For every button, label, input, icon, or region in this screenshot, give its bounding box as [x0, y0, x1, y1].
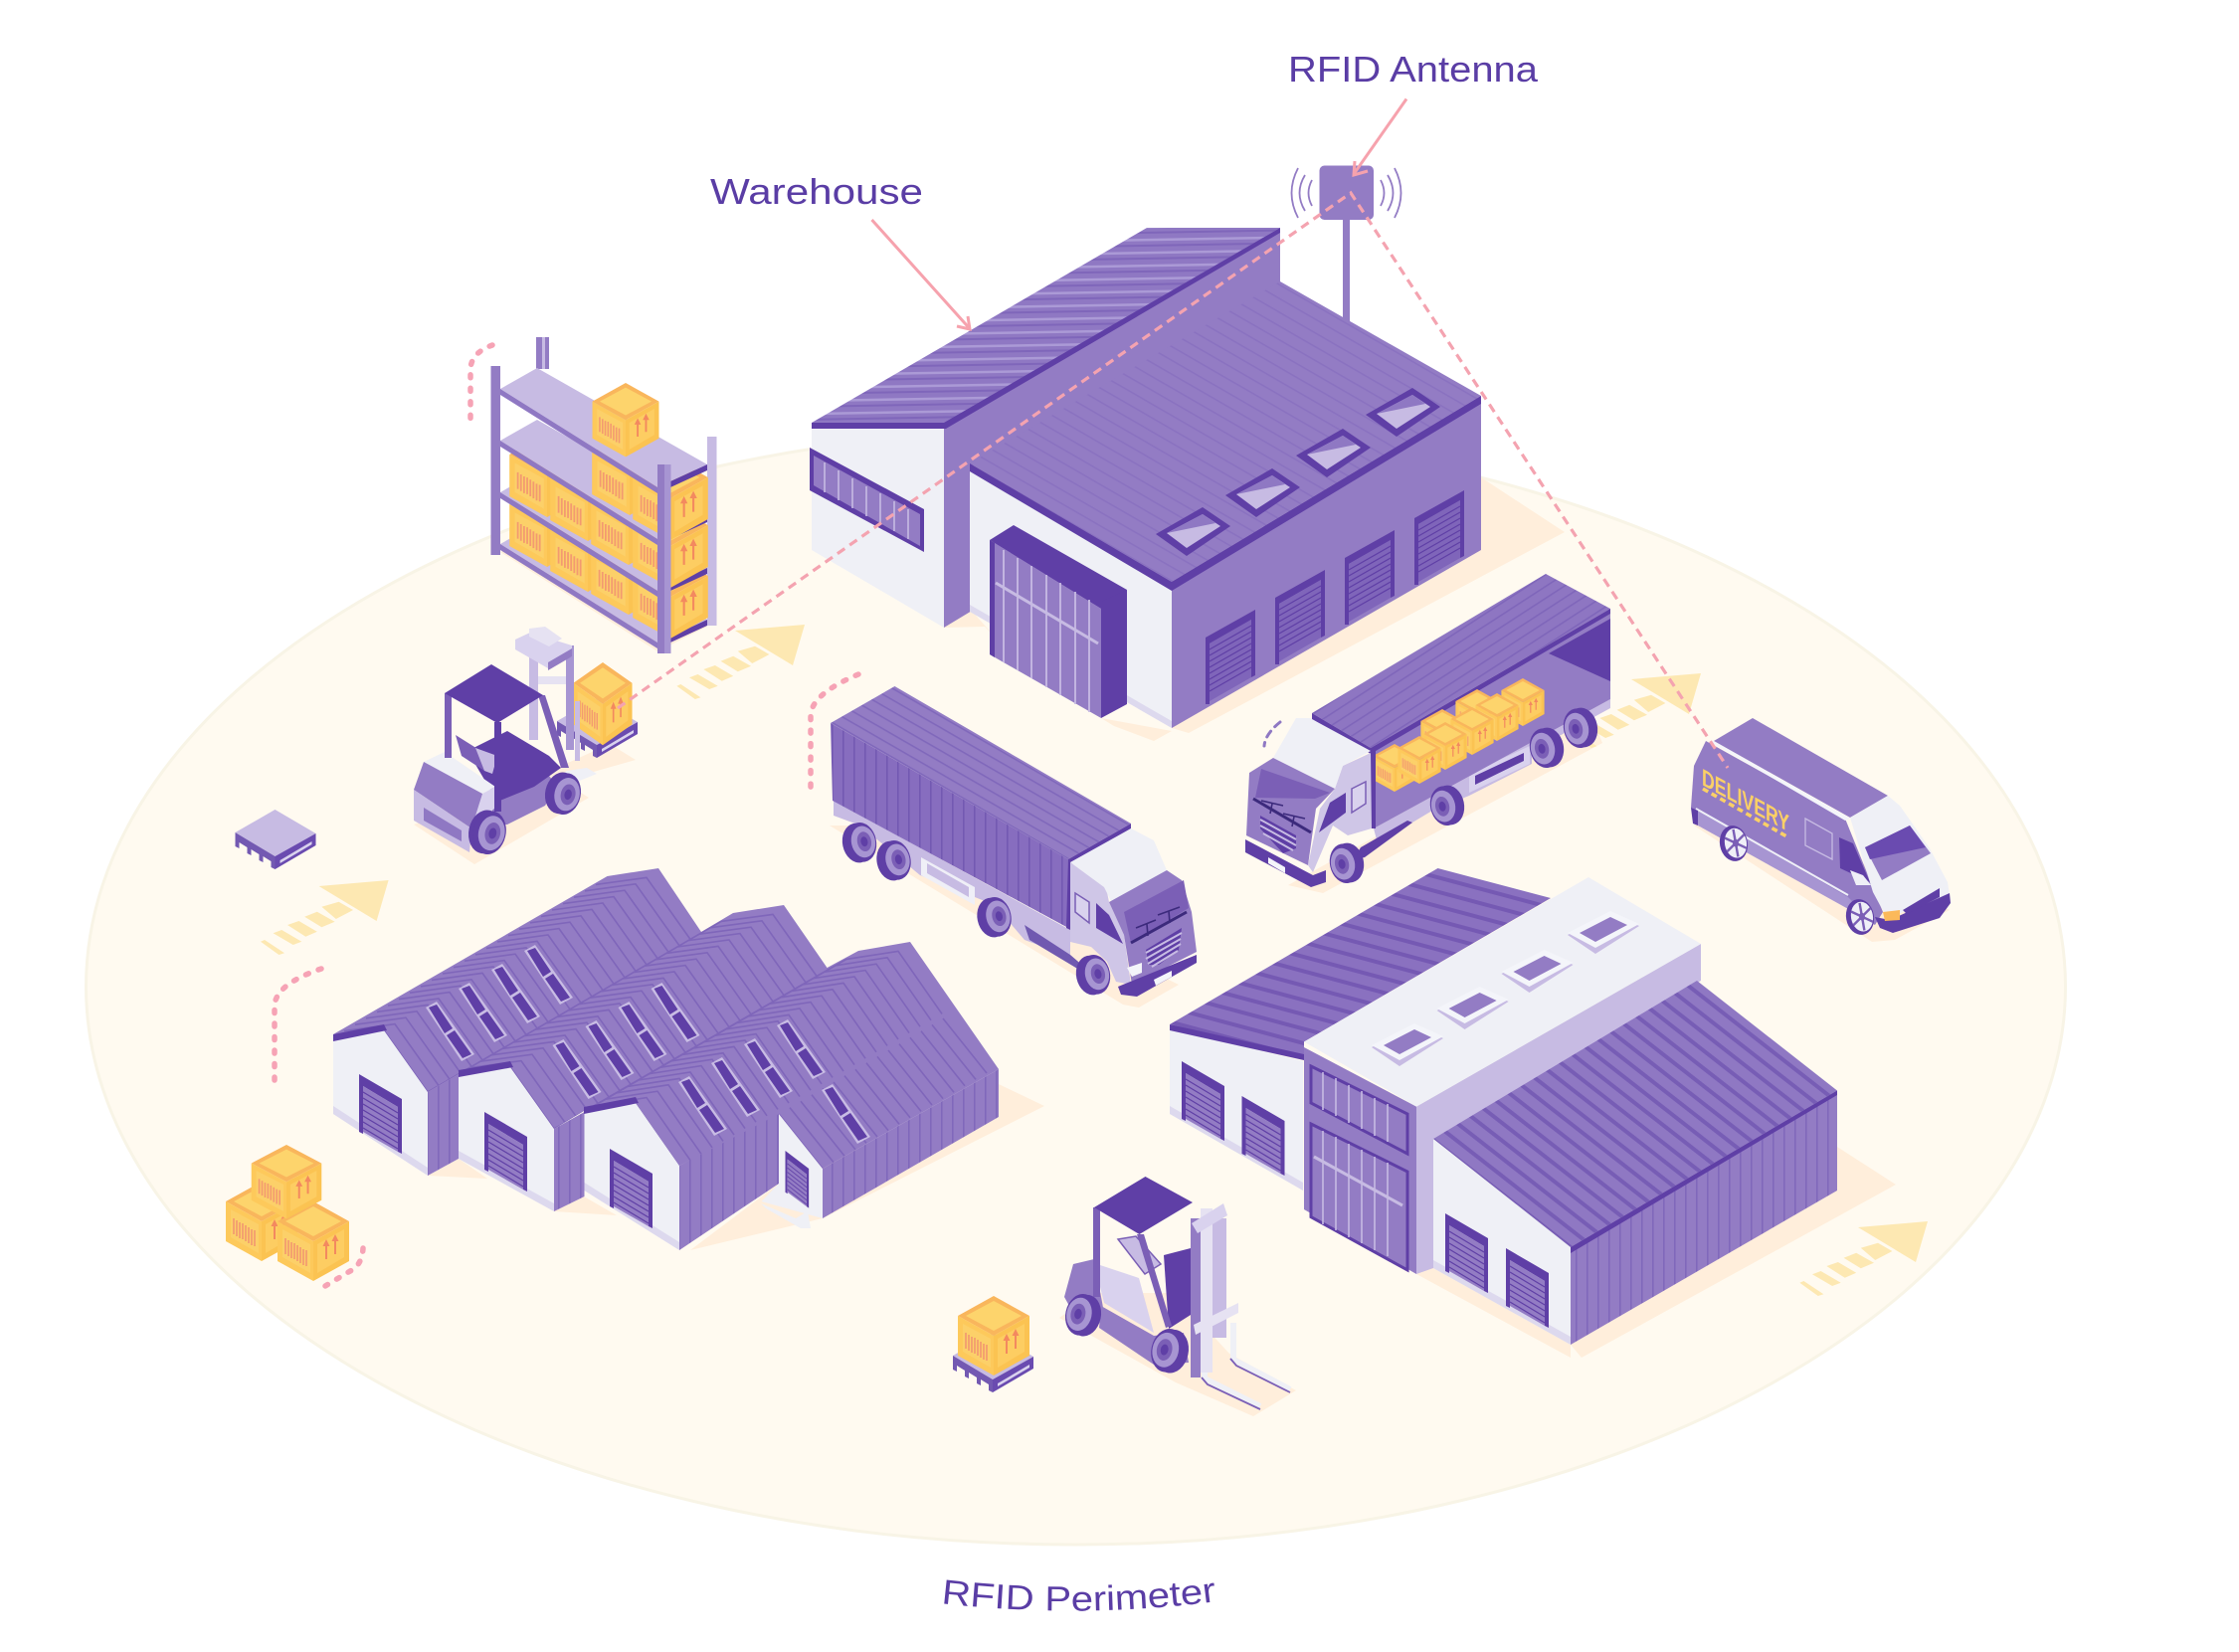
- shelf rack: [491, 337, 716, 653]
- warehouse side window: [810, 448, 924, 552]
- forklift body: [414, 664, 597, 852]
- direction arrow: truck: [1573, 673, 1701, 748]
- warehouse: [810, 228, 1481, 728]
- antenna: [1291, 165, 1400, 333]
- right warehouse shutter doors front: [1445, 1213, 1549, 1328]
- rfid signal path: dashed lines: [618, 193, 1728, 768]
- truck cargo boxes: [1373, 678, 1545, 792]
- annex gable: [762, 1114, 823, 1218]
- direction arrow: warehouse: [676, 625, 805, 699]
- shelf: second: [500, 420, 707, 545]
- stacked crates: [226, 1145, 349, 1281]
- label: Warehouse: Warehouse: [710, 171, 923, 212]
- warehouse main door: [990, 525, 1127, 718]
- delivery dashes: [1703, 789, 1788, 837]
- lower forklift body: [1064, 1177, 1193, 1365]
- delivery label: DELIVERY: [1702, 764, 1789, 837]
- forklift wheels: [465, 807, 510, 857]
- lower forklift mast: [1191, 1203, 1238, 1377]
- central upper window: [1311, 1066, 1407, 1154]
- central big door: [1311, 1124, 1407, 1270]
- lower forklift wheels: [1061, 1291, 1105, 1339]
- forks: [1202, 1323, 1290, 1409]
- forklift with crate: [414, 627, 638, 857]
- direction arrow: lower right: [1799, 1221, 1928, 1296]
- sawtooth roof: [333, 868, 999, 1169]
- container truck cab: [1070, 828, 1197, 997]
- container truck: [831, 686, 1197, 998]
- RFID perimeter ellipse: [86, 429, 2065, 1545]
- crate on pallet: [953, 1296, 1033, 1392]
- open side truck: [1245, 574, 1610, 887]
- sawtooth building: [333, 868, 999, 1250]
- warehouse skylights: [1156, 388, 1440, 556]
- lower forklift: [1061, 1177, 1290, 1409]
- shelf: third: [500, 471, 707, 597]
- cab motion marks: [1264, 722, 1280, 746]
- empty pallet: [235, 810, 316, 869]
- open side truck wheels: [1426, 783, 1468, 828]
- right warehouse: [1170, 868, 1837, 1345]
- annex step: [761, 1203, 811, 1228]
- container truck wheels: [839, 820, 880, 865]
- label: RFID Perimeter: RFID Perimeter: [944, 1579, 1214, 1611]
- warehouse shutter doors: [1206, 490, 1464, 704]
- right warehouse shutter doors left: [1182, 1061, 1285, 1176]
- boxes: upper row: [592, 432, 708, 540]
- boxes: lower row: [509, 483, 708, 639]
- white roof skylights: [1372, 911, 1639, 1066]
- sawtooth skylights: [426, 945, 870, 1144]
- van wheels: [1717, 824, 1751, 863]
- label: RFID Antenna: RFID Antenna: [1288, 49, 1539, 90]
- open side truck cab: [1245, 718, 1412, 887]
- forklift mast: [515, 627, 580, 761]
- sawtooth shutter doors: [359, 1074, 809, 1228]
- crate on top shelf: [593, 383, 658, 457]
- callout arrow: antenna: [1354, 99, 1406, 175]
- callout arrow: warehouse: [871, 220, 970, 329]
- forklift pallet: [557, 698, 638, 758]
- shelf: top: [500, 368, 707, 493]
- shelf: bottom: [500, 523, 707, 648]
- delivery van: [1691, 718, 1951, 937]
- ground shadows: [414, 477, 1950, 1416]
- dashed route marks: [275, 345, 858, 1286]
- crate on forks: [573, 662, 633, 745]
- boxes: middle row: [509, 434, 708, 588]
- direction arrow: sawtooth building: [261, 880, 389, 955]
